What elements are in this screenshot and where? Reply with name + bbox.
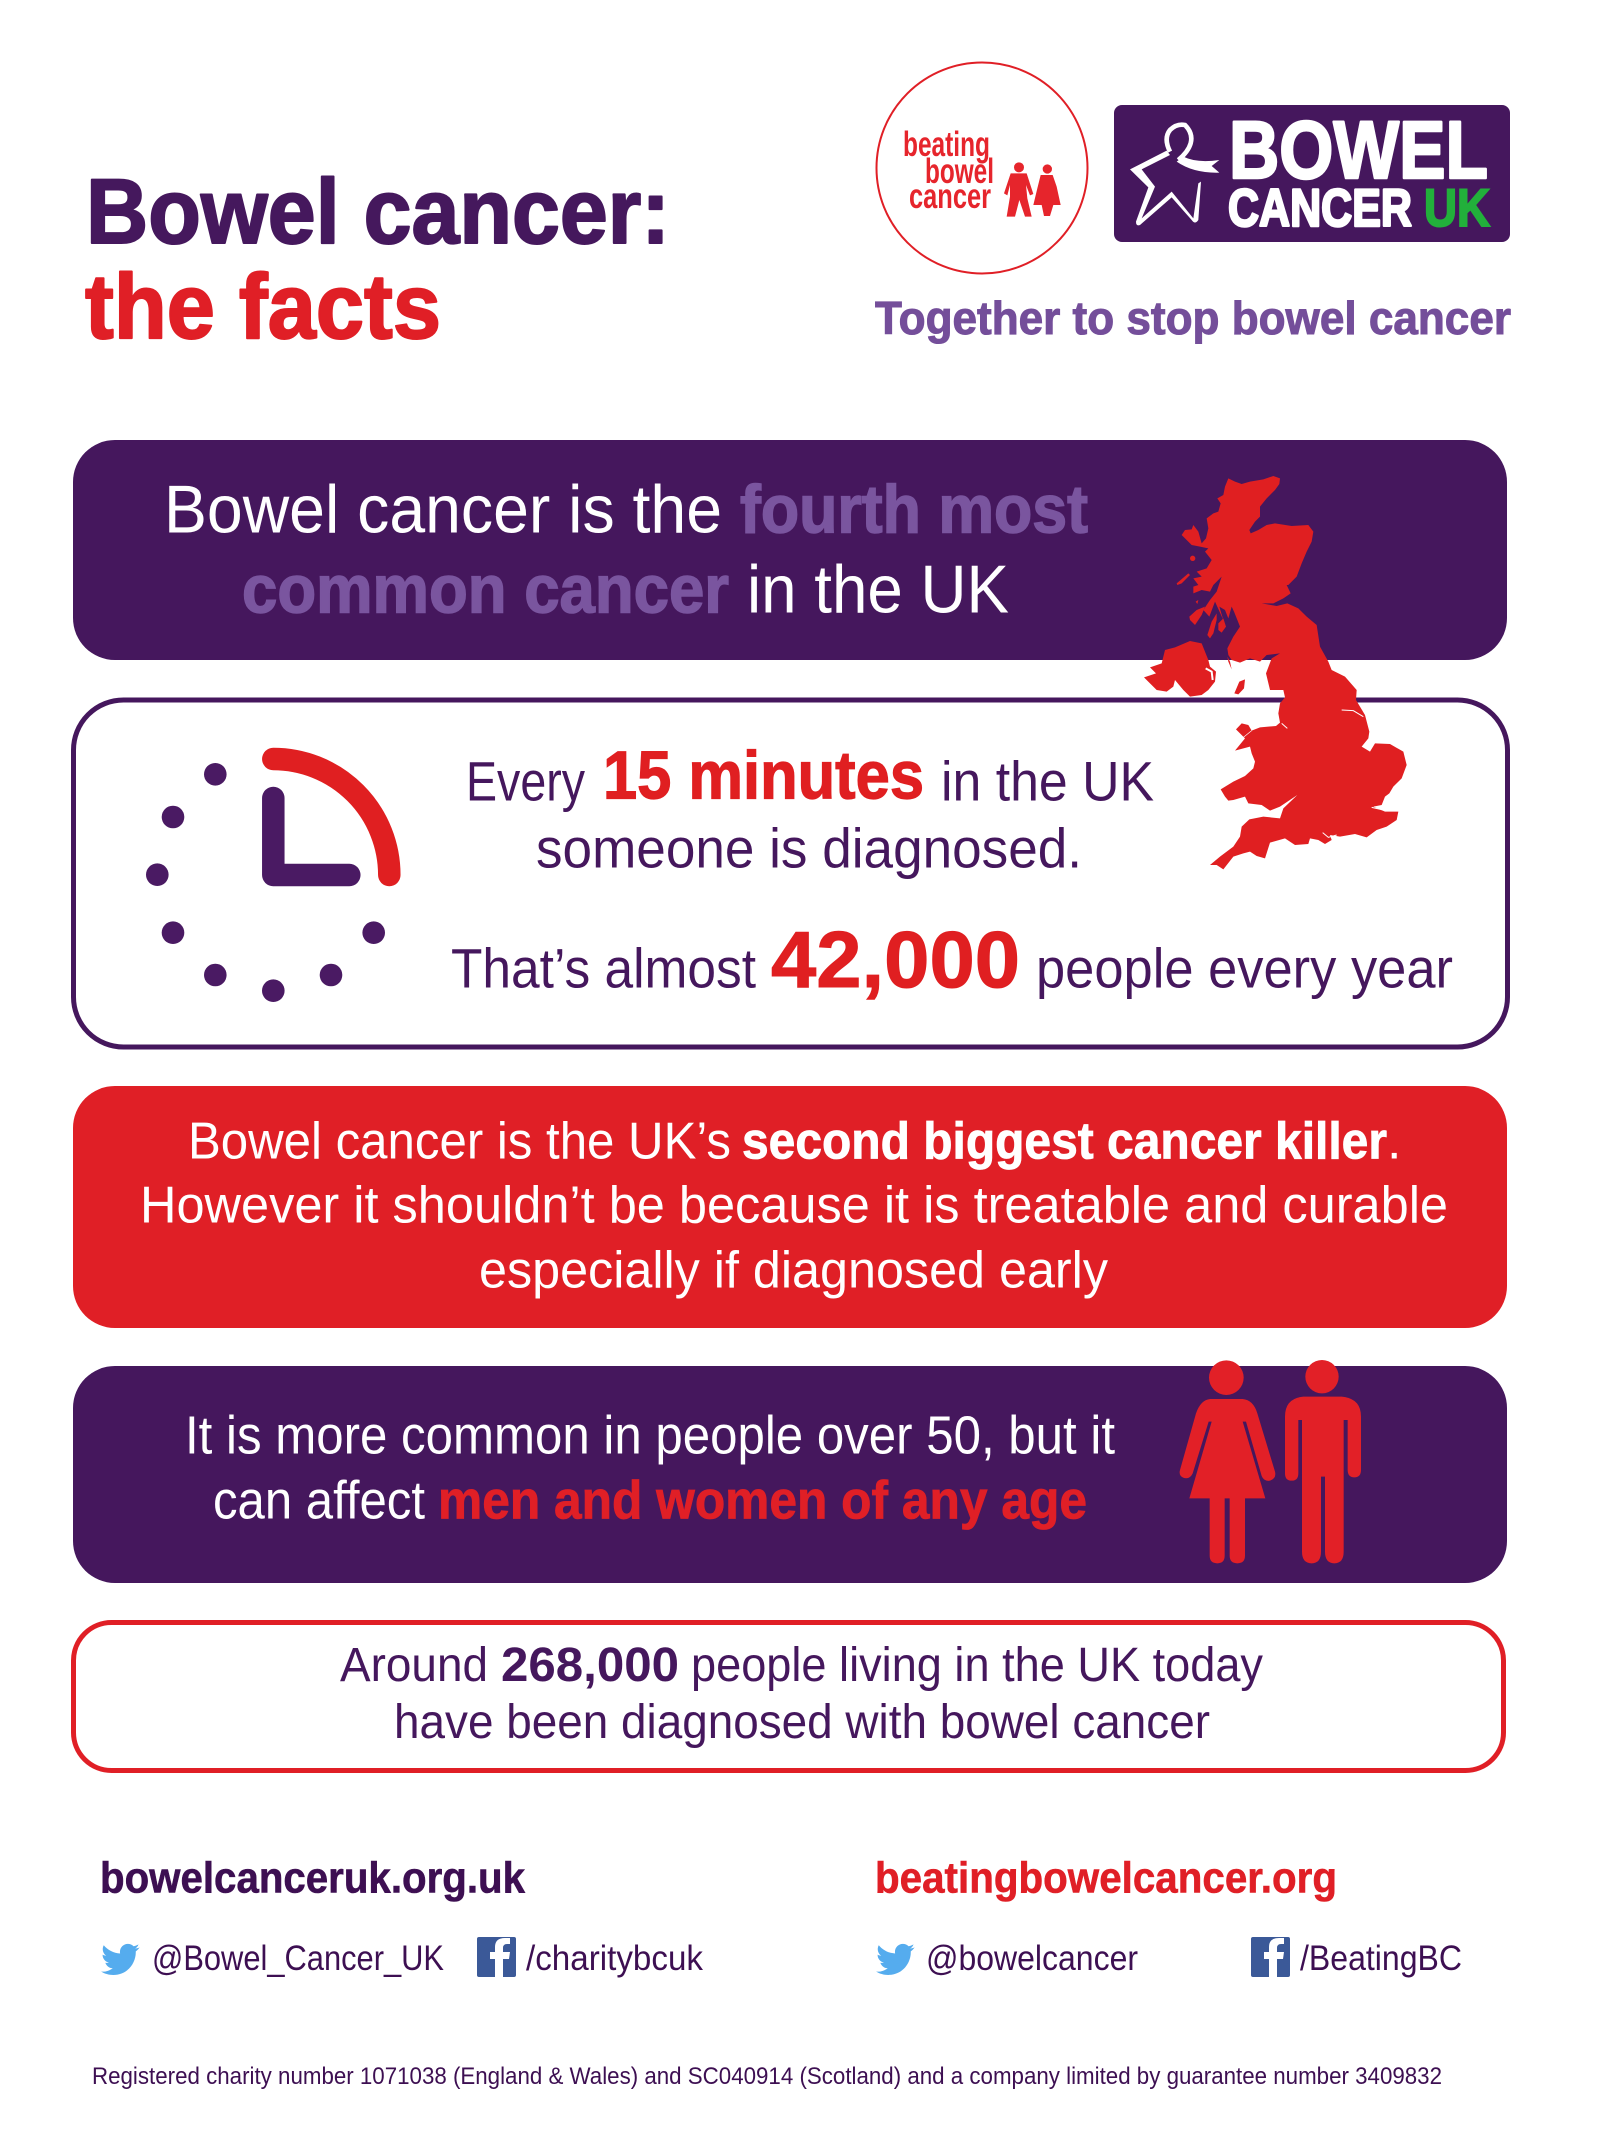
text: 42,000 people: That’s almost bbox=[451, 936, 756, 1000]
panel: second biggest cancer killer bbox=[73, 1086, 1507, 1328]
map: UK bbox=[1144, 476, 1407, 869]
icon: ribbon star bbox=[1130, 125, 1219, 225]
logo: Bowel Cancer UK: BOWEL bbox=[1229, 105, 1488, 196]
panel: 268,000 people: Around bbox=[340, 1639, 488, 1692]
logo: Bowel Cancer UK bbox=[1114, 105, 1510, 242]
panel: second biggest cancer killer: especially if diagnosed early bbox=[479, 1242, 1108, 1300]
text: every 15 minutes: someone is diagnosed. bbox=[536, 816, 1082, 880]
footer: Beating Bowel Cancer contacts bbox=[875, 1854, 1462, 1978]
footer: Bowel Cancer UK contacts: bowelcanceruk.org.uk bbox=[100, 1854, 525, 1902]
logo: beating bowel cancer bbox=[876, 62, 1088, 274]
panel: 268,000 people: have been diagnosed with bowel cancer bbox=[394, 1696, 1210, 1749]
footer: Beating Bowel Cancer contacts: beatingbowelcancer.org bbox=[875, 1854, 1337, 1902]
title bbox=[85, 161, 670, 358]
panel: fourth most common cancer: Bowel cancer is the bbox=[164, 472, 722, 548]
tagline: Together to stop bowel cancer bbox=[875, 292, 1511, 344]
text: 42,000 people: people every year bbox=[1036, 936, 1453, 1000]
icon: twitter bbox=[101, 1944, 140, 1975]
panel: men and women of any age: can affect bbox=[213, 1470, 425, 1530]
footer: Bowel Cancer UK contacts: @Bowel_Cancer_UK bbox=[152, 1939, 444, 1978]
text: every 15 minutes: in the UK bbox=[941, 750, 1154, 812]
title: Bowel cancer: bbox=[86, 161, 670, 263]
footer: Beating Bowel Cancer contacts: /BeatingBC bbox=[1300, 1939, 1462, 1978]
icon: facebook bbox=[1251, 1937, 1290, 1977]
footer: charity registration: Registered charity number 1071038 (England & Wales) and SC040914 (Scotland) and a company limited by guarantee number 3409832 bbox=[92, 2063, 1442, 2090]
logo: beating bowel cancer: cancer bbox=[909, 177, 991, 216]
panel: fourth most common cancer: common cancer bbox=[242, 552, 729, 628]
footer: Beating Bowel Cancer contacts: @bowelcancer bbox=[926, 1939, 1138, 1978]
panel: second biggest cancer killer: Bowel cancer is the UK’s bbox=[188, 1112, 731, 1170]
panel: second biggest cancer killer: . bbox=[1387, 1112, 1401, 1170]
panel: fourth most common cancer: in the UK bbox=[747, 552, 1009, 628]
icon: facebook bbox=[477, 1937, 516, 1977]
text: 42,000 people bbox=[451, 915, 1453, 1004]
text: 42,000 people: 42,000 bbox=[771, 915, 1020, 1004]
panel: fourth most common cancer: fourth most bbox=[740, 472, 1088, 548]
footer: Bowel Cancer UK contacts: /charitybcuk bbox=[526, 1939, 703, 1978]
panel: men and women of any age: It is more common in people over 50, but it bbox=[185, 1406, 1115, 1466]
icon: twitter bbox=[876, 1944, 915, 1975]
panel: second biggest cancer killer: However it shouldn’t be because it is treatable and curable bbox=[140, 1176, 1448, 1234]
panel: every 15 minutes bbox=[74, 700, 1508, 1047]
panel: men and women of any age bbox=[73, 1360, 1507, 1583]
panel: fourth most common cancer bbox=[73, 440, 1507, 660]
panel: men and women of any age: men and women of any age bbox=[438, 1470, 1087, 1530]
icon: woman and man bbox=[1180, 1360, 1361, 1563]
title: the facts bbox=[85, 256, 441, 358]
panel: 268,000 people: people living in the UK today bbox=[691, 1639, 1263, 1692]
logo: beating bowel cancer: beating bbox=[903, 125, 990, 164]
logo: beating bowel cancer: bowel bbox=[925, 152, 994, 191]
text: every 15 minutes: Every bbox=[466, 750, 585, 812]
logo: Bowel Cancer UK: UK bbox=[1424, 179, 1490, 238]
text: every 15 minutes: 15 minutes bbox=[603, 738, 924, 814]
icon: clock bbox=[146, 759, 389, 1002]
footer: Bowel Cancer UK contacts bbox=[100, 1854, 703, 1978]
text: every 15 minutes bbox=[466, 738, 1154, 880]
panel: second biggest cancer killer: second biggest cancer killer bbox=[742, 1112, 1387, 1170]
logo: Bowel Cancer UK: CANCER bbox=[1228, 179, 1412, 238]
panel: 268,000 people: 268,000 bbox=[501, 1639, 679, 1692]
panel: 268,000 people bbox=[74, 1622, 1504, 1770]
